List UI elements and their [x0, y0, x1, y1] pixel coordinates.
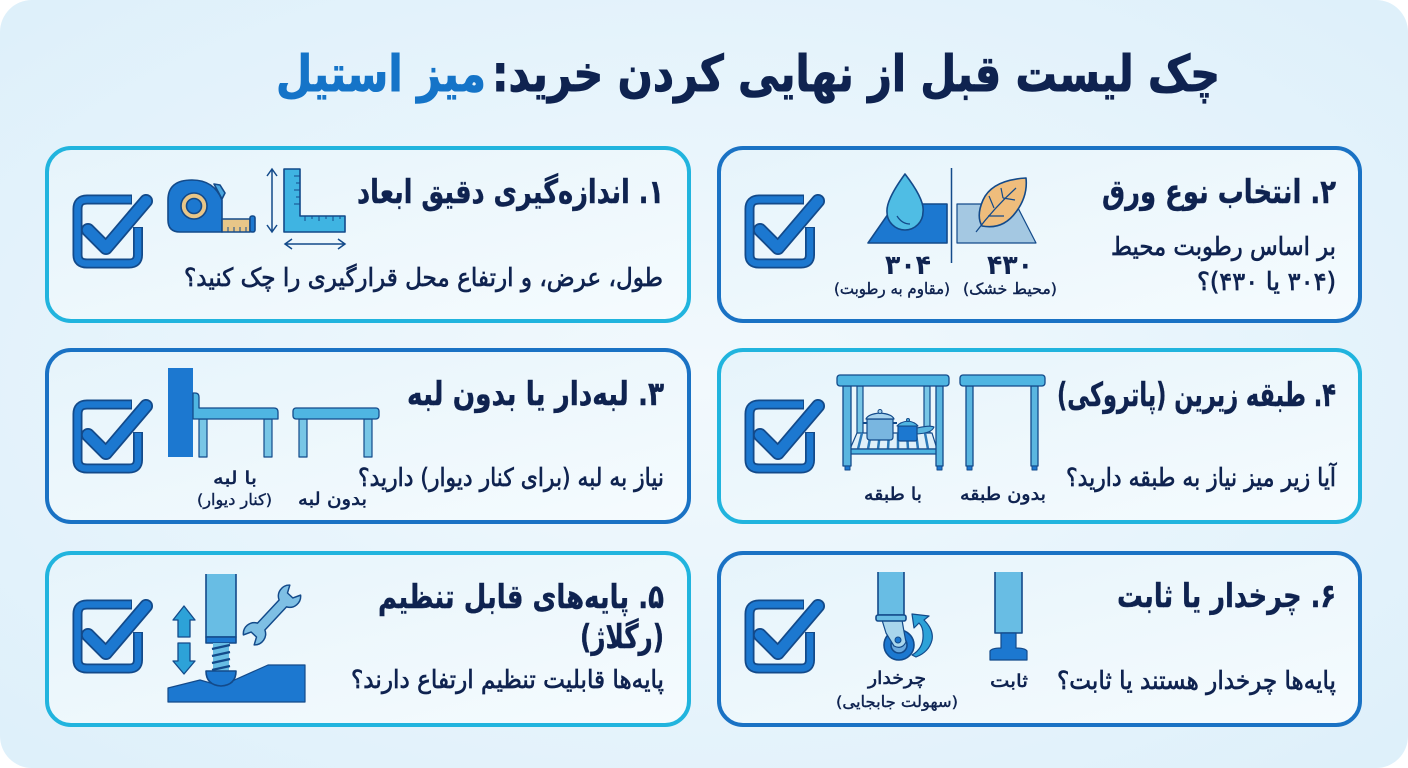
- text: question 2: [1111, 232, 1336, 296]
- label: 430: [963, 250, 1057, 298]
- label: without shelf: بدون طبقه: [960, 484, 1046, 505]
- heading 3: ۳. لبه‌دار یا بدون لبه: [407, 374, 664, 414]
- icon: 430 leaf on pale sheet: [957, 178, 1036, 243]
- icon: wrench: [241, 582, 303, 648]
- icon: fixed foot: [990, 572, 1027, 660]
- heading 1: ۱. اندازه‌گیری دقیق ابعاد: [357, 172, 664, 212]
- text: question 6: پایه‌ها چرخدار هستند یا ثابت؟: [1057, 666, 1336, 695]
- panel: 6 castor or fixed: [719, 553, 1360, 725]
- label: 304: (مقاوم به رطوبت): [834, 280, 950, 299]
- panel: 2 sheet type: [719, 148, 1360, 321]
- text: question 1: طول، عرض، و ارتفاع محل قرارگیری را چک کنید؟: [184, 263, 663, 293]
- icon: checkbox: [750, 404, 818, 468]
- heading 5: [378, 577, 664, 656]
- heading 6: ۶. چرخدار یا ثابت: [1117, 576, 1336, 616]
- text: question 3: نیاز به لبه (برای کنار دیوار) دارید؟: [358, 463, 664, 492]
- arrow: width: [285, 239, 345, 249]
- icon: 304 water drop on blue sheet: [868, 174, 947, 243]
- label: castor: چرخدار: [867, 668, 926, 689]
- icon: height arrows: [173, 606, 195, 674]
- title: [276, 45, 1220, 104]
- label: with upstand: [197, 468, 272, 509]
- icon: checkbox: [78, 604, 146, 668]
- panel: 5 adjustable feet: [47, 553, 689, 725]
- label: 430: (محیط خشک): [963, 280, 1057, 298]
- icon: checkbox: [750, 604, 818, 668]
- text: question 5: پایه‌ها قابلیت تنظیم ارتفاع دارند؟: [351, 665, 664, 695]
- heading 5: (رگلاژ): [580, 617, 664, 656]
- heading 5: ۵. پایه‌های قابل تنظیم: [378, 577, 664, 616]
- panel: 4 lower shelf: [719, 350, 1360, 522]
- label: with upstand: با لبه: [213, 468, 257, 489]
- text: question 2: بر اساس رطوبت محیط: [1111, 232, 1336, 261]
- label: without upstand: بدون لبه: [298, 489, 367, 510]
- label: castor: (سهولت جابجایی): [836, 693, 958, 712]
- label: with upstand: (کنار دیوار): [197, 491, 272, 509]
- text: question 4: آیا زیر میز نیاز به طبقه دارید؟: [1066, 462, 1337, 492]
- icon: L square ruler: [284, 169, 345, 232]
- arrow: height: [267, 169, 277, 232]
- title: میز استیل: [276, 45, 486, 104]
- label: castor: [836, 668, 958, 712]
- label: 304: ۳۰۴: [885, 250, 931, 281]
- label: fixed: ثابت: [990, 671, 1028, 692]
- title: چک لیست قبل از نهایی کردن خرید:: [492, 45, 1220, 104]
- label: 430: ۴۳۰: [987, 250, 1033, 281]
- icon: checkbox: [78, 200, 146, 264]
- icon: castor wheel with arrow: [876, 572, 932, 660]
- icon: table without shelf: [960, 375, 1045, 470]
- label: with shelf: با طبقه: [864, 484, 922, 505]
- icon: table without upstand: [293, 408, 379, 457]
- panel: 1 measuring dimensions: [47, 148, 689, 321]
- panel: 3 lipped or flat: [47, 350, 689, 522]
- label: 304: [834, 250, 950, 299]
- divider: [950, 168, 952, 263]
- icon: tape measure: [168, 180, 255, 232]
- text: question 2: (۳۰۴ یا ۴۳۰)؟: [1197, 267, 1336, 296]
- icon: checkbox: [78, 404, 146, 468]
- icon: table with shelf and pots: [837, 375, 949, 470]
- heading 2: ۲. انتخاب نوع ورق: [1102, 172, 1336, 212]
- icon: checkbox: [750, 200, 818, 264]
- icon: levelling foot: [168, 574, 305, 702]
- icon: table with upstand by wall: [168, 368, 278, 457]
